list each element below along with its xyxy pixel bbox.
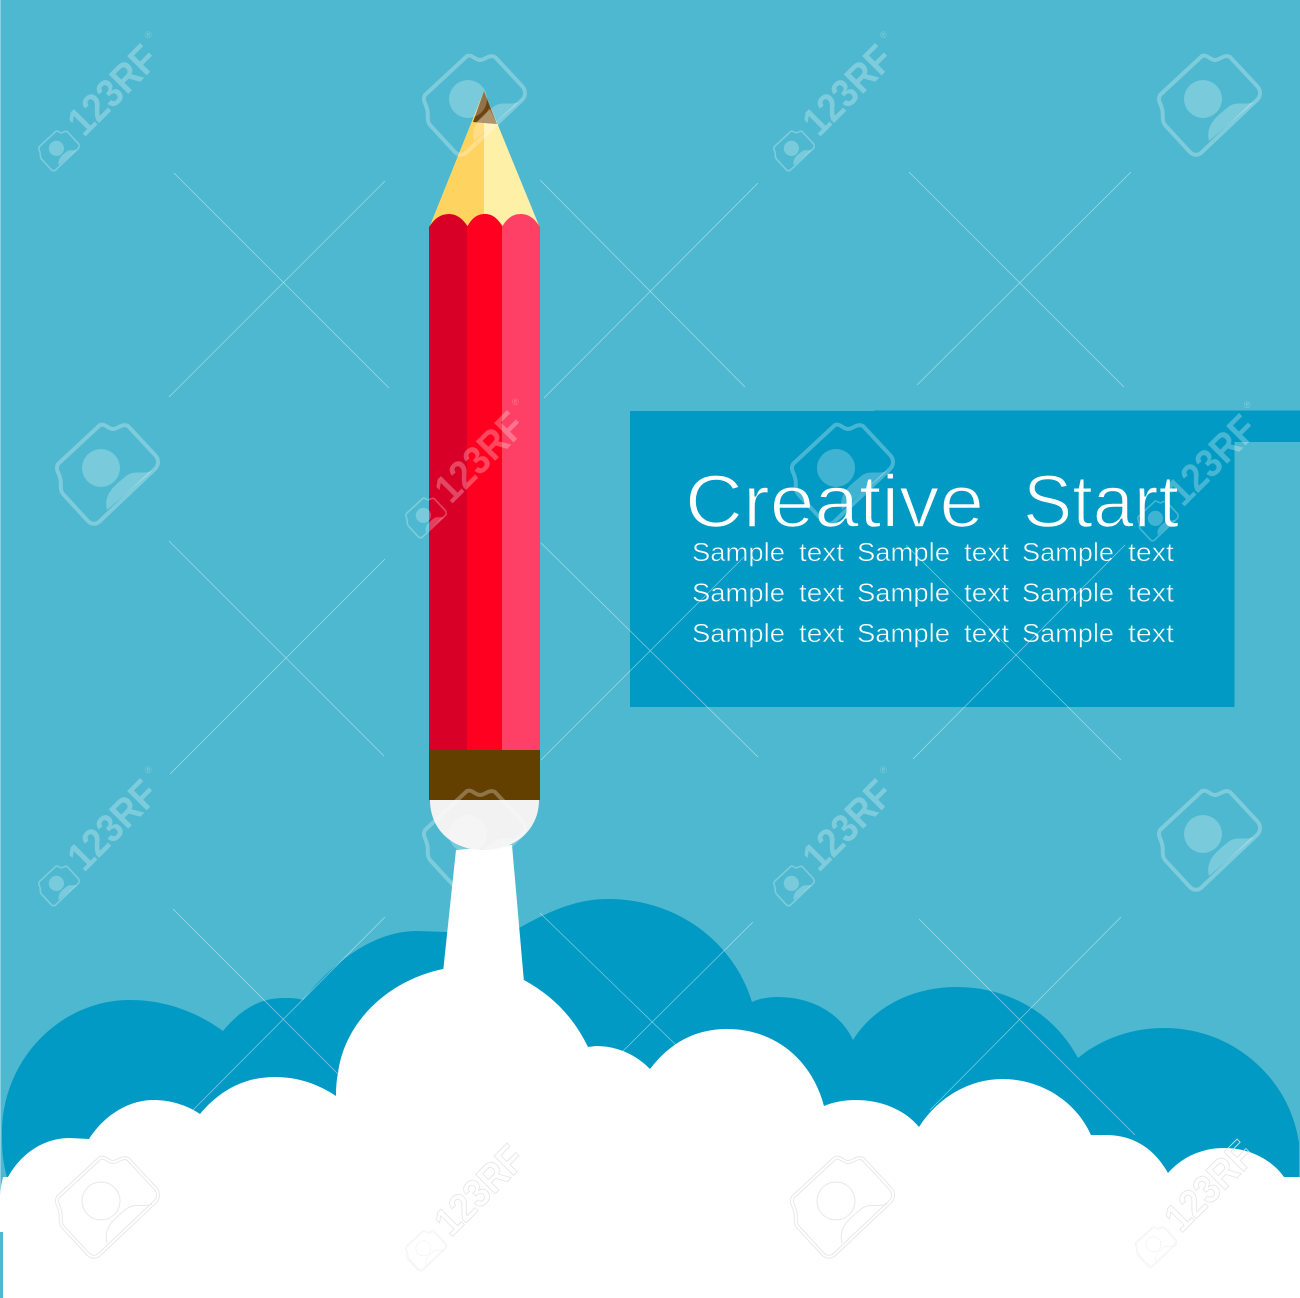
heading: Creative Start xyxy=(685,460,1179,543)
watermark: 123RF logos: 123RF xyxy=(426,1137,534,1244)
watermark: 123RF logos: ® xyxy=(880,30,887,40)
watermark: 123RF logos: ® xyxy=(880,765,887,775)
pencil body left stripe xyxy=(429,214,468,750)
watermark: 123RF logos: 123RF xyxy=(1158,407,1266,514)
sample text line 3: text xyxy=(1128,618,1175,648)
watermark: 123RF logos: 123RF xyxy=(59,37,167,144)
sample text line 3: Sample xyxy=(1022,618,1114,648)
sample text line 2 xyxy=(692,578,1175,608)
sample text line 1: Sample xyxy=(1022,537,1114,567)
white exhaust flame xyxy=(443,845,524,982)
pencil body centre stripe xyxy=(467,214,503,750)
sample text line 3: text xyxy=(799,618,845,648)
pencil cone, shaded wood xyxy=(429,91,540,228)
watermark: 123RF logos: 123RF xyxy=(794,37,902,144)
sample text line 3: text xyxy=(964,618,1010,648)
text panel xyxy=(630,410,1300,707)
pencil body right stripe xyxy=(502,214,540,750)
watermark: 123RF logos: ® xyxy=(512,397,519,407)
heading: Creative Start: Creative xyxy=(685,460,984,543)
watermark: 123RF logos: 123RF xyxy=(1156,1133,1264,1240)
sample text line 2: text xyxy=(964,578,1010,608)
sample text line 2: Sample xyxy=(1022,578,1114,608)
watermark: 123RF logos: 123RF xyxy=(59,772,167,879)
pencil rocket xyxy=(429,91,540,850)
pencil eraser xyxy=(430,800,539,850)
white front cloud xyxy=(0,969,1300,1298)
pencil brown ferrule xyxy=(429,750,540,800)
watermark: 123RF logos: ® xyxy=(145,765,152,775)
sample text line 3: Sample xyxy=(692,618,785,648)
watermark: 123RF logos: 123RF xyxy=(426,404,534,511)
sample text line 1: text xyxy=(964,537,1010,567)
sample text line 1: Sample xyxy=(857,537,950,567)
sample text line 1 xyxy=(692,537,1175,567)
watermark: 123RF logos: ® xyxy=(1244,400,1251,410)
sample text line 2: text xyxy=(799,578,845,608)
watermark: 123RF logos: 123RF xyxy=(794,772,902,879)
sample text line 1: text xyxy=(1128,537,1175,567)
watermark: 123RF logos: ® xyxy=(145,30,152,40)
sample text line 2: text xyxy=(1128,578,1175,608)
sample text line 2: Sample xyxy=(692,578,785,608)
sample text line 1: text xyxy=(799,537,845,567)
pencil graphite point xyxy=(473,91,497,124)
sample text line 3: Sample xyxy=(857,618,950,648)
sample text line 1: Sample xyxy=(692,537,785,567)
dark blue back cloud xyxy=(0,899,1299,1200)
sample text line 3 xyxy=(692,618,1175,648)
heading: Creative Start: Start xyxy=(1023,460,1179,543)
sample text line 2: Sample xyxy=(857,578,950,608)
